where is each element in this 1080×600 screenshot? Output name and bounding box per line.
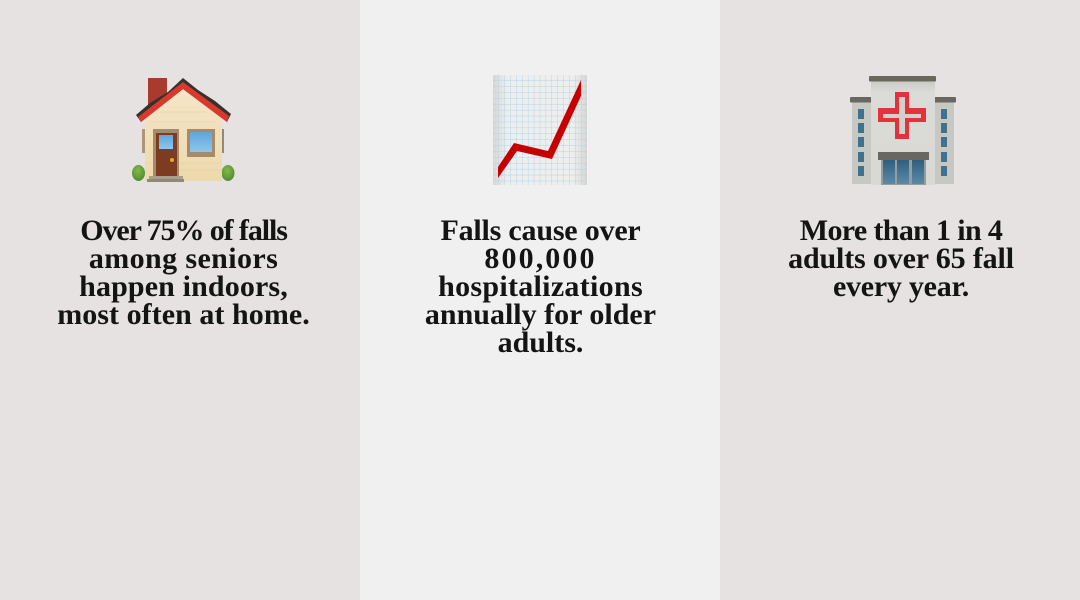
panel: home falls xyxy=(0,0,360,600)
text: hospitalizations statistic: Falls cause over xyxy=(440,214,641,247)
panel: hospitalizations xyxy=(360,0,720,600)
text: annual falls statistic: adults over 65 fall xyxy=(788,242,1014,275)
icon: hospital xyxy=(850,76,956,185)
text: home falls statistic: Over 75% of falls xyxy=(80,214,287,247)
icon: house xyxy=(132,78,234,182)
panel: annual falls xyxy=(720,0,1080,600)
text: home falls statistic xyxy=(57,214,310,331)
text: annual falls statistic: More than 1 in 4 xyxy=(800,214,1002,247)
text: home falls statistic: among seniors xyxy=(89,242,278,275)
text: home falls statistic: most often at home. xyxy=(57,298,310,331)
text: hospitalizations statistic xyxy=(425,214,656,359)
text: home falls statistic: happen indoors, xyxy=(79,270,288,303)
text: annual falls statistic: every year. xyxy=(833,270,969,303)
text: annual falls statistic xyxy=(788,214,1014,303)
text: hospitalizations statistic: adults. xyxy=(498,326,583,359)
text: hospitalizations statistic: annually for older xyxy=(425,298,656,331)
icon: rising chart xyxy=(493,75,587,185)
text: hospitalizations statistic: hospitalizations xyxy=(438,270,643,303)
text: hospitalizations statistic: 800,000 xyxy=(484,242,597,275)
